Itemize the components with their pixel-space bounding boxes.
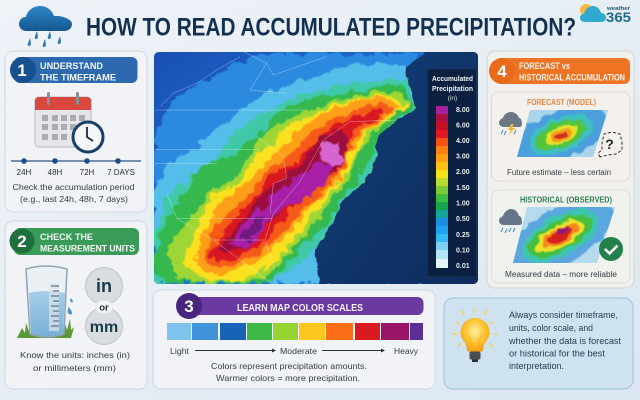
icon: light bulb bbox=[452, 308, 498, 362]
unit badge: mm bbox=[86, 308, 122, 344]
legend labels: 0.10 bbox=[456, 248, 470, 254]
step 4 heading bbox=[489, 58, 630, 84]
logo: weather 365: 365 bbox=[606, 9, 631, 25]
unit badge: in: in bbox=[96, 276, 112, 296]
legend labels: 0.25 bbox=[456, 232, 470, 239]
timeframe description bbox=[12, 182, 135, 204]
legend labels: 3.00 bbox=[456, 154, 470, 160]
icon: check mark bbox=[599, 237, 623, 261]
legend bbox=[427, 69, 476, 277]
step 2 heading bbox=[10, 228, 139, 255]
tip text bbox=[508, 310, 622, 371]
panel: learn map color scales bbox=[153, 290, 435, 389]
step 4 heading: FORECAST vs bbox=[519, 61, 570, 72]
icon: rain cloud bbox=[19, 6, 72, 47]
card: historical bbox=[492, 185, 630, 287]
card: forecast bbox=[492, 92, 630, 181]
tip text: or historical for the best bbox=[509, 348, 606, 358]
units description bbox=[20, 350, 130, 373]
timeframe description: (e.g., last 24h, 48h, 7 days) bbox=[20, 194, 128, 204]
state borders bbox=[155, 52, 397, 283]
step 3 heading: 3 bbox=[184, 297, 194, 316]
scale labels and arrows bbox=[170, 346, 419, 356]
icon: uncertain dashed cloud: ? bbox=[605, 136, 614, 152]
step 3 heading: LEARN MAP COLOR SCALES bbox=[237, 303, 363, 314]
unit badge: in bbox=[86, 268, 122, 304]
legend labels: 8.00 bbox=[456, 107, 470, 114]
scale labels and arrows: Light bbox=[170, 346, 190, 356]
color scale description bbox=[211, 361, 367, 383]
unit badge: or: or bbox=[99, 302, 109, 314]
legend labels: 1.00 bbox=[456, 200, 470, 208]
legend labels: 6.00 bbox=[456, 122, 470, 130]
color scale description: Warmer colors = more precipitation. bbox=[216, 373, 360, 383]
tip text: whether the data is forecast bbox=[508, 336, 622, 346]
legend labels: 1.50 bbox=[456, 185, 470, 192]
card: historical: HISTORICAL (OBSERVED) bbox=[520, 196, 612, 204]
legend: precipitation scale bbox=[432, 74, 473, 270]
map: accumulated precipitation bbox=[150, 50, 480, 285]
timeline: 48H bbox=[48, 168, 63, 177]
step 2 heading: MEASUREMENT UNITS bbox=[40, 244, 135, 254]
legend: precipitation scale: Accumulated bbox=[432, 74, 473, 83]
legend colour bar bbox=[436, 106, 448, 268]
legend labels: 2.00 bbox=[456, 169, 470, 176]
icon: calendar and clock bbox=[35, 92, 103, 152]
step 1 heading: THE TIMEFRAME bbox=[40, 72, 116, 84]
panel: check the measurement units bbox=[5, 221, 147, 389]
color scale bar bbox=[167, 323, 423, 340]
logo: weather 365: weather bbox=[606, 6, 631, 12]
step 4 heading: 4 bbox=[497, 62, 507, 81]
card: forecast: FORECAST (MODEL) bbox=[527, 98, 596, 107]
step 2 heading: 2 bbox=[17, 232, 27, 251]
step 1 heading: UNDERSTAND bbox=[40, 61, 103, 72]
icon: storm cloud bbox=[499, 112, 522, 135]
step 3 heading bbox=[176, 293, 424, 319]
logo: weather 365 bbox=[580, 4, 631, 25]
units description: or millimeters (mm) bbox=[33, 363, 116, 373]
unit badge: mm: mm bbox=[90, 319, 118, 336]
step 2 heading: CHECK THE bbox=[40, 232, 93, 243]
unit badge: or bbox=[95, 300, 113, 314]
legend: precipitation scale: (in) bbox=[448, 95, 457, 102]
timeline: 72H bbox=[80, 168, 95, 177]
timeline: 7 DAYS bbox=[107, 168, 135, 177]
historical map bbox=[513, 207, 615, 263]
legend: precipitation scale: Precipitation bbox=[432, 84, 473, 93]
units description: Know the units: inches (in) bbox=[20, 350, 130, 360]
tip text: units, color scale, and bbox=[509, 323, 593, 333]
timeline: 24H bbox=[17, 168, 32, 177]
step 1 heading: 1 bbox=[17, 61, 27, 80]
timeframe description: Check the accumulation period bbox=[12, 182, 135, 192]
ocean bbox=[315, 50, 480, 285]
panel: tip bbox=[444, 298, 633, 389]
tip text: interpretation. bbox=[509, 361, 564, 371]
legend labels: 0.01 bbox=[456, 263, 470, 270]
scale labels and arrows: Heavy bbox=[394, 346, 419, 356]
card: historical: Measured data – more reliable bbox=[505, 270, 618, 279]
card: forecast: Future estimate – less certain bbox=[507, 168, 611, 177]
color scale description: Colors represent precipitation amounts. bbox=[211, 361, 367, 371]
scale labels and arrows: Moderate bbox=[280, 346, 317, 356]
timeline bbox=[11, 158, 141, 177]
icon: rain gauge beaker in grass bbox=[17, 266, 74, 338]
step 1 heading bbox=[10, 57, 138, 84]
panel: understand the timeframe bbox=[5, 51, 147, 212]
forecast map bbox=[517, 110, 608, 157]
legend labels bbox=[456, 107, 470, 270]
panel: forecast vs historical accumulation bbox=[487, 51, 634, 288]
legend labels: 4.00 bbox=[456, 138, 470, 145]
tip text: Always consider timeframe, bbox=[509, 310, 618, 320]
icon: rain cloud bbox=[499, 209, 522, 233]
legend labels: 0.50 bbox=[456, 216, 470, 223]
